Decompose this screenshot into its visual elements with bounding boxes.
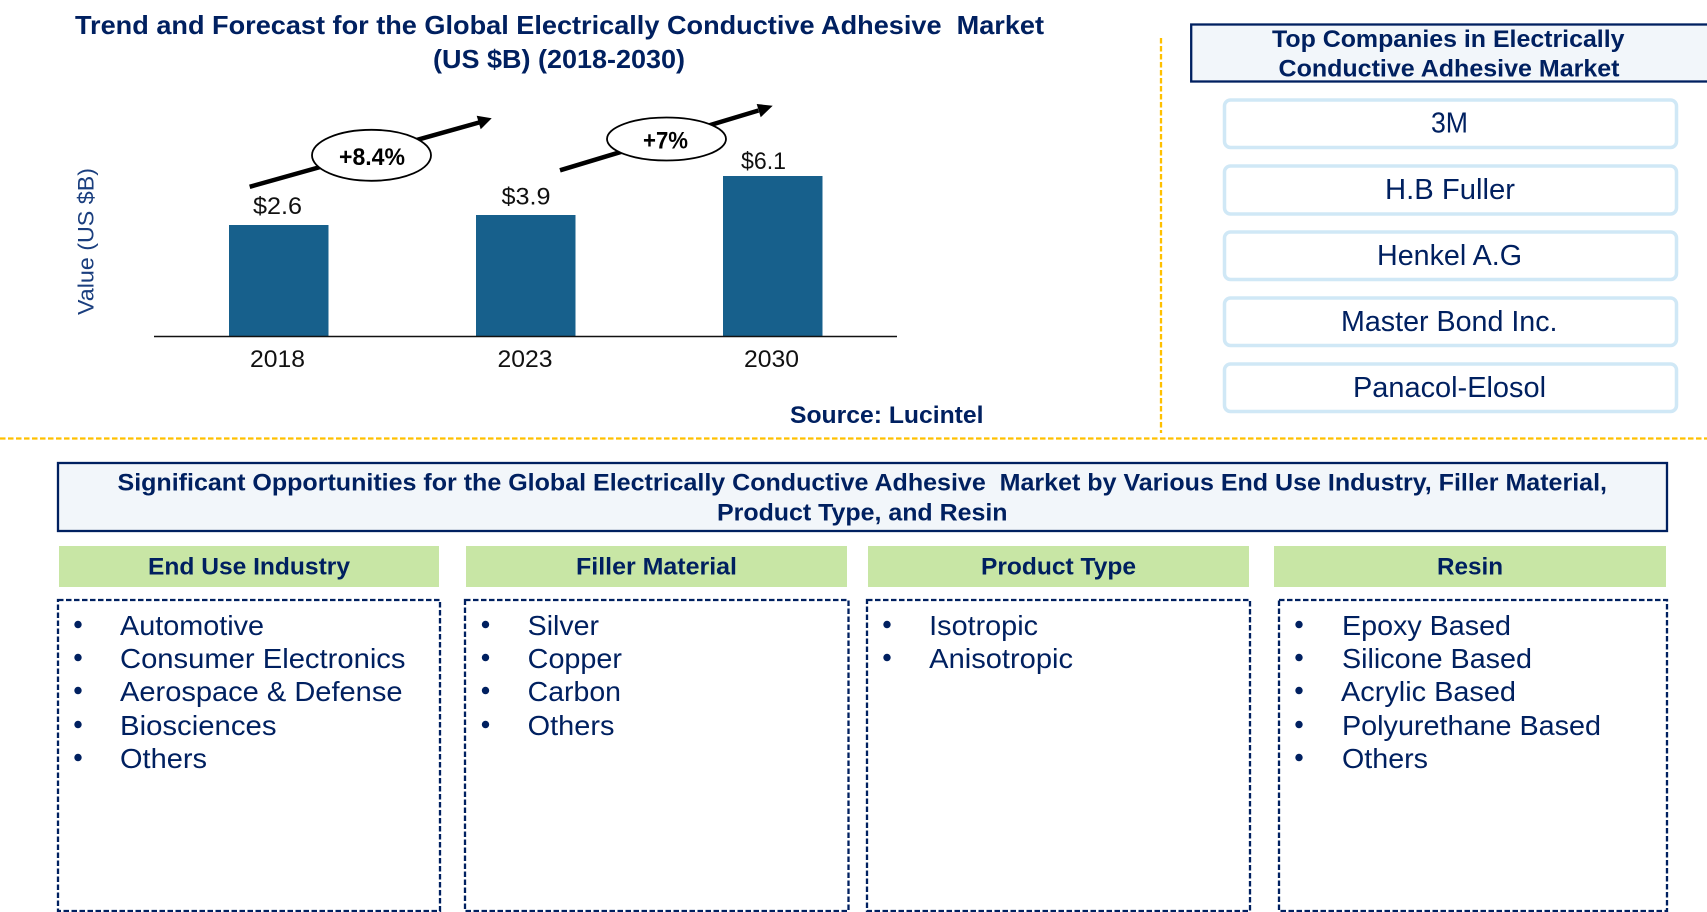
bar chart xyxy=(74,148,897,373)
company: Master Bond Inc.: Master Bond Inc. xyxy=(1341,306,1558,338)
growth arrow 2023-2030 with CAGR callout: +7% xyxy=(643,128,688,154)
company: Henkel A.G: Henkel A.G xyxy=(1377,240,1522,272)
panel: resin xyxy=(1274,546,1667,911)
growth arrow 2018-2023 with CAGR callout: +8.4% xyxy=(339,144,405,171)
column header xyxy=(868,546,1249,587)
column header: Product Type xyxy=(981,554,1136,581)
x axis xyxy=(154,336,897,338)
panel: top companies xyxy=(1191,24,1707,412)
list box: Automotive xyxy=(120,610,264,641)
chart title: (US $B) (2018-2030) xyxy=(433,46,685,74)
company: H.B Fuller xyxy=(1224,166,1676,214)
list box: Others xyxy=(120,743,207,774)
source note: Source: Lucintel xyxy=(790,402,984,429)
company: 3M: 3M xyxy=(1431,108,1468,140)
panel: filler material xyxy=(465,546,848,911)
list box: Silver xyxy=(528,610,599,641)
list box xyxy=(58,600,440,911)
growth arrow 2018-2023 with CAGR callout xyxy=(250,116,492,187)
column header xyxy=(466,546,847,587)
column header xyxy=(1274,546,1666,587)
bar 2030: $6.1 xyxy=(741,148,786,175)
list box: Carbon xyxy=(528,676,621,707)
list box xyxy=(1279,600,1667,911)
company: Henkel A.G xyxy=(1224,232,1676,280)
list box: Polyurethane Based xyxy=(1342,710,1601,741)
growth arrow 2023-2030 with CAGR callout xyxy=(560,104,773,170)
company: Master Bond Inc. xyxy=(1224,298,1676,346)
list box xyxy=(465,600,848,911)
companies heading xyxy=(1191,24,1707,82)
column header: Filler Material xyxy=(576,554,737,581)
bar 2018: $2.6 xyxy=(253,193,302,220)
companies heading: Conductive Adhesive Market xyxy=(1278,56,1620,82)
list box: Anisotropic xyxy=(929,643,1073,674)
chart title: Trend and Forecast for the Global Electrically Conductive Adhesive Market xyxy=(75,12,1044,40)
opportunities heading: Product Type, and Resin xyxy=(717,500,1008,527)
bar 2023: 2023 xyxy=(498,346,552,373)
column header: End Use Industry xyxy=(148,554,351,581)
company: Panacol-Elosol: Panacol-Elosol xyxy=(1353,372,1546,404)
bar 2030 xyxy=(723,148,822,373)
chart title xyxy=(75,12,1044,74)
list box: Biosciences xyxy=(120,710,276,741)
column header: Resin xyxy=(1437,554,1503,581)
list box: Aerospace & Defense xyxy=(120,676,402,707)
companies heading: Top Companies in Electrically xyxy=(1272,26,1625,53)
company: 3M xyxy=(1224,100,1676,148)
bar 2023: $3.9 xyxy=(502,184,550,211)
y axis label: Value (US $B) xyxy=(74,168,98,315)
company: Panacol-Elosol xyxy=(1224,364,1676,412)
bar 2018: 2018 xyxy=(250,346,305,373)
list box: Acrylic Based xyxy=(1341,676,1516,707)
company: H.B Fuller: H.B Fuller xyxy=(1385,174,1516,206)
list box: Others xyxy=(528,710,614,741)
list box: Epoxy Based xyxy=(1342,610,1511,641)
opportunities heading: Significant Opportunities for the Global Electrically Conductive Adhesive Market by Various End Use Industry, Filler Material, xyxy=(118,470,1607,497)
list box: Others xyxy=(1342,743,1428,774)
list box: Isotropic xyxy=(929,610,1038,641)
bar 2018 xyxy=(229,193,328,373)
list box: Copper xyxy=(528,643,622,674)
column header xyxy=(59,546,439,587)
bar 2030: 2030 xyxy=(744,346,799,373)
list box: Consumer Electronics xyxy=(120,643,406,674)
bar 2023 xyxy=(476,184,576,373)
list box xyxy=(867,600,1250,911)
panel: product type xyxy=(867,546,1250,911)
panel: end use industry xyxy=(58,546,440,911)
opportunities heading xyxy=(58,463,1667,531)
list box: Silicone Based xyxy=(1342,643,1532,674)
